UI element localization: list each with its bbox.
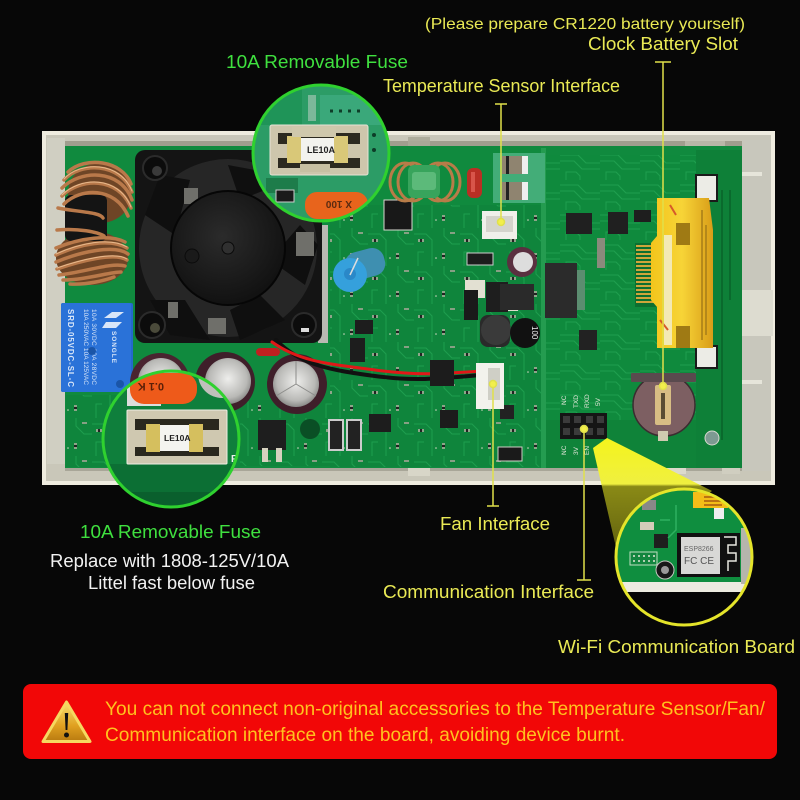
label: top fuse: 10A Removable Fuse xyxy=(226,52,408,72)
communication header: NC xyxy=(561,395,568,405)
green terminal block xyxy=(493,153,545,203)
circuit board xyxy=(65,146,742,468)
relay: SRD-05VDC-SL-C xyxy=(66,309,75,387)
leader line: clock battery slot xyxy=(655,62,671,390)
label: battery note: (Please prepare CR1220 battery yourself) xyxy=(425,16,745,33)
leader line: temperature sensor interface xyxy=(495,104,507,226)
leader line: fan interface xyxy=(487,380,499,506)
inset: top fuse magnifier: LE10A xyxy=(307,145,336,155)
warning banner xyxy=(23,684,777,759)
communication header: RXD xyxy=(584,394,591,408)
coin battery holder xyxy=(631,373,719,445)
communication header xyxy=(560,394,607,455)
enclosure shell xyxy=(42,131,775,485)
filter inductor xyxy=(390,163,460,201)
red and black fan wires xyxy=(260,340,495,379)
inset: Wi-Fi communication board: FC CE xyxy=(684,556,714,567)
icon: warning triangle xyxy=(43,702,90,742)
temperature connector xyxy=(482,211,517,239)
toroid inductor xyxy=(56,162,132,285)
communication header: EN xyxy=(584,446,591,455)
inset: bottom fuse magnifier xyxy=(102,370,240,508)
red capacitor xyxy=(467,168,482,198)
relay: 10A 250VAC 10A 125VAC xyxy=(82,309,89,385)
blue varistor xyxy=(333,245,388,292)
relay xyxy=(61,303,133,392)
device enclosure with circuit board xyxy=(42,131,775,485)
label: temperature sensor interface: Temperature Sensor Interface xyxy=(383,76,620,96)
communication header: 3V xyxy=(573,446,580,455)
yellow flex cable xyxy=(651,198,713,348)
inset: Wi-Fi communication board xyxy=(610,485,760,625)
SMD chips and parts xyxy=(258,200,659,462)
inset: Wi-Fi communication board: ESP8266 xyxy=(684,546,714,553)
text: fuse replacement line one: Replace with 1808-125V/10A xyxy=(50,551,289,571)
communication header: 5V xyxy=(595,397,602,406)
leader line: communication interface xyxy=(577,426,591,580)
fan connector xyxy=(476,363,504,409)
label: fan interface: Fan Interface xyxy=(440,514,550,534)
label: Wi-Fi communication board: Wi-Fi Communication Board xyxy=(558,637,795,657)
warning text xyxy=(105,699,766,746)
label: clock battery slot: Clock Battery Slot xyxy=(588,34,738,54)
label: bottom fuse: 10A Removable Fuse xyxy=(80,522,261,542)
warning text: You can not connect non-original accessories to the Temperature Sensor/Fan/ xyxy=(105,699,766,720)
cooling fan xyxy=(135,150,328,343)
banner background xyxy=(23,684,777,759)
inset: bottom fuse magnifier: LE10A xyxy=(164,433,190,443)
warning text: Communication interface on the board, avoiding device burnt. xyxy=(105,725,625,746)
text: fuse replacement line two: Littel fast below fuse xyxy=(88,573,255,593)
communication header: TXD xyxy=(573,395,580,408)
relay: SONGLE xyxy=(110,331,117,364)
SMD chips and parts: 100 xyxy=(530,326,539,340)
inset: top fuse magnifier: X 100 xyxy=(325,198,352,209)
relay: 10A 30VDC 10A 28VDC xyxy=(90,309,97,385)
electrolytic capacitors xyxy=(130,352,327,414)
label: communication interface: Communication Interface xyxy=(383,582,594,602)
inset: top fuse magnifier xyxy=(252,85,390,221)
communication header: NC xyxy=(561,445,568,455)
inset: bottom fuse magnifier: 0.1 K xyxy=(138,380,164,392)
callout: yellow projection beam xyxy=(593,438,712,556)
inset: bottom fuse magnifier: F xyxy=(231,454,237,465)
